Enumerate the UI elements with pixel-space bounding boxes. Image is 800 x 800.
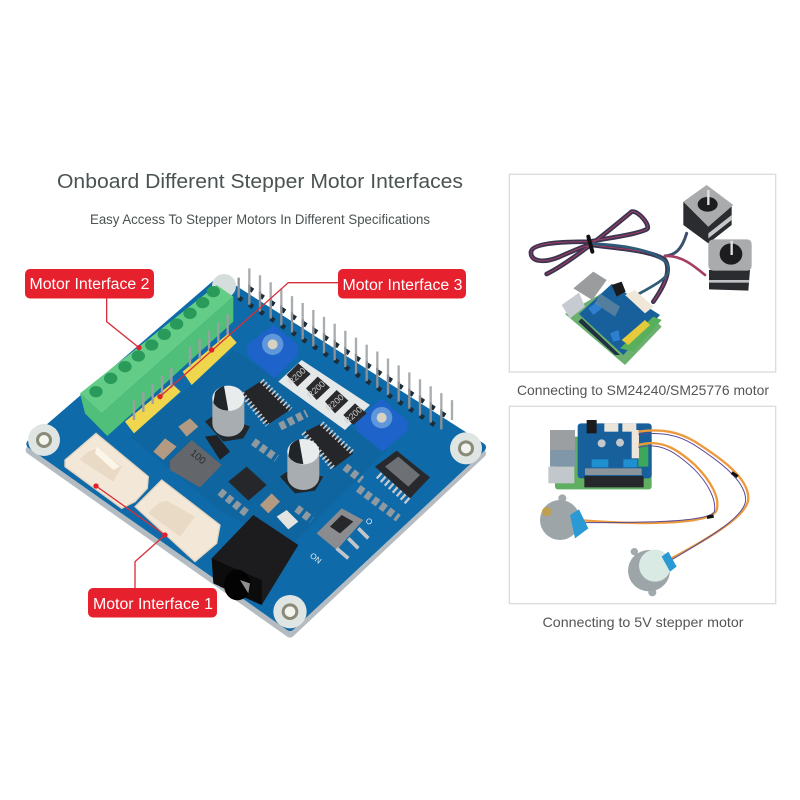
subtitle: Easy Access To Stepper Motors In Different Specifications: [90, 212, 430, 227]
slide switch: [317, 508, 368, 558]
panel: 5V stepper motor connection: [509, 406, 776, 604]
caption: SM24240/SM25776 motor: Connecting to SM24240/SM25776 motor: [517, 382, 769, 398]
board edge: [30, 285, 482, 633]
motor cable bundle: [531, 212, 705, 302]
callout: Motor Interface 3: [338, 269, 466, 298]
product photo: motor driver board: [28, 268, 482, 633]
stepper motor top: [683, 185, 733, 243]
driver chips: [242, 381, 353, 468]
shunt resistors: R200: [286, 365, 308, 387]
stepper motor bottom: [708, 239, 752, 291]
small ic and components: [153, 413, 398, 529]
leader dots: [93, 345, 214, 538]
electrolytic capacitors: [205, 386, 323, 493]
callout: Motor Interface 1: Motor Interface 1: [93, 596, 213, 613]
callout: Motor Interface 3: Motor Interface 3: [342, 277, 462, 294]
blue trimmers: [247, 325, 408, 452]
DIP switch: [375, 451, 430, 502]
shunt resistors: [278, 360, 370, 430]
yellow pin headers: [125, 315, 237, 433]
leader lines: [96, 283, 339, 588]
GPIO header pins: [239, 268, 452, 429]
Raspberry Pi with hat: [548, 420, 652, 489]
callout: Motor Interface 2: Motor Interface 2: [30, 276, 150, 293]
stacked board on Raspberry Pi: [562, 272, 662, 365]
orange and purple cables: [578, 430, 748, 561]
white motor connector B: [135, 480, 220, 562]
shunt resistors: R200: [342, 404, 364, 426]
title: Onboard Different Stepper Motor Interfaces: [57, 171, 463, 193]
board surface: [31, 281, 482, 627]
callout: Motor Interface 1: [88, 588, 217, 618]
callout: Motor Interface 2: [25, 269, 154, 298]
stepper motor right: [628, 548, 677, 596]
DC power jack: [212, 515, 298, 605]
inductor: [170, 440, 222, 487]
stepper motor left: [540, 494, 588, 540]
white motor connector A: [65, 433, 148, 508]
board silk text: O: [364, 516, 374, 527]
mounting holes: [28, 274, 482, 628]
board silk text: [308, 516, 374, 566]
green screw terminal: [80, 285, 233, 436]
inductor: 100: [188, 448, 208, 467]
board silk text: ON: [308, 551, 323, 566]
shunt resistors: R200: [324, 392, 346, 413]
caption: 5V stepper motor: Connecting to 5V stepper motor: [542, 614, 744, 630]
panel: SM24240 motor connection: [509, 174, 776, 372]
shunt resistors: R200: [305, 379, 327, 400]
